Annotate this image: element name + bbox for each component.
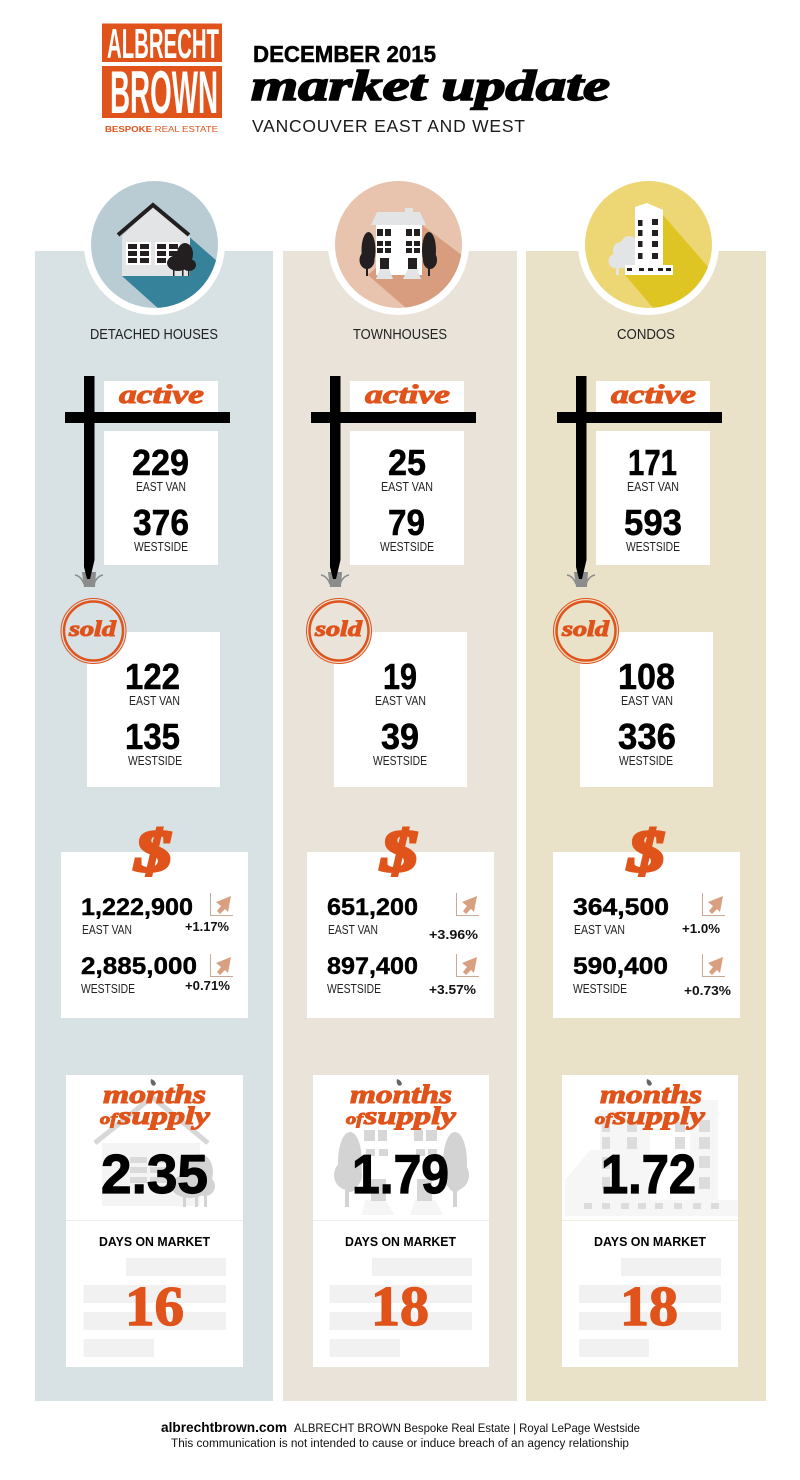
supply card: detached: of [100, 1111, 119, 1128]
active sign: detached: EAST VAN [136, 480, 186, 494]
footer: This communication is not intended to cause or induce breach of an agency relationship [171, 1438, 629, 1450]
supply card: condos: of [595, 1111, 614, 1128]
footer: ALBRECHT BROWN Bespoke Real Estate | Royal LePage Westside [294, 1421, 640, 1435]
active sign: townhouses: WESTSIDE [380, 540, 434, 554]
sold: detached: 135 [125, 716, 180, 757]
sold: detached: WESTSIDE [128, 754, 182, 768]
sold: detached: sold [68, 616, 117, 641]
price panel: detached: 2,885,000 [81, 953, 197, 980]
sold: condos: EAST VAN [621, 694, 673, 708]
sold: townhouses: sold [314, 616, 363, 641]
price panel: townhouses: +3.57% [429, 982, 476, 997]
sold: detached [61, 598, 220, 787]
active sign: detached [65, 376, 230, 587]
price panel: detached: $ [134, 818, 172, 884]
price panel: condos: EAST VAN [574, 923, 625, 937]
supply card: townhouses: of [346, 1111, 365, 1128]
sold: townhouses: WESTSIDE [373, 754, 427, 768]
sold: condos [554, 598, 713, 787]
supply card: condos: supply [612, 1103, 706, 1130]
logo [102, 20, 222, 134]
supply card: detached: months [103, 1080, 206, 1109]
title: market update: market update [251, 63, 610, 110]
sold: detached: 122 [125, 656, 180, 697]
supply card: detached: DAYS ON MARKET [99, 1234, 210, 1249]
active sign: detached: 229 [132, 442, 189, 483]
active sign: townhouses: active [365, 380, 450, 409]
active sign: condos: active [611, 380, 696, 409]
price panel: townhouses: +3.96% [429, 927, 478, 942]
active sign: condos: EAST VAN [627, 480, 679, 494]
sold: townhouses: 39 [381, 716, 419, 757]
active sign: condos: WESTSIDE [626, 540, 680, 554]
price panel: condos: $ [627, 818, 665, 884]
title: date: DECEMBER 2015 [253, 41, 436, 67]
active sign: condos [557, 376, 722, 587]
active sign: townhouses [311, 376, 476, 587]
supply card: townhouses: 1.79 [352, 1143, 449, 1205]
supply card: condos [562, 1075, 738, 1367]
price panel: detached: +1.17% [185, 919, 229, 934]
label: townhouses: TOWNHOUSES [353, 327, 447, 343]
footer: albrechtbrown.com [161, 1419, 287, 1435]
price panel: townhouses: 651,200 [327, 894, 418, 921]
price panel: townhouses: EAST VAN [328, 923, 378, 937]
supply card: townhouses: months [350, 1080, 452, 1109]
panel: townhouses background [283, 251, 517, 1401]
price panel: condos: 590,400 [573, 953, 668, 980]
supply card: condos: months [600, 1080, 702, 1109]
price panel: condos: WESTSIDE [573, 982, 627, 996]
active sign: townhouses: 25 [388, 442, 426, 483]
sold: condos: 108 [618, 656, 675, 697]
active sign: detached: 376 [133, 502, 189, 543]
label: detached houses: DETACHED HOUSES [90, 327, 218, 343]
supply card: condos: 1.72 [601, 1143, 696, 1205]
sold: townhouses: 19 [383, 656, 417, 697]
supply card: detached: supply [117, 1103, 211, 1130]
icon: condo tower [578, 174, 719, 315]
supply card: townhouses: DAYS ON MARKET [345, 1234, 456, 1249]
supply card: detached [66, 1075, 243, 1367]
sold: condos: 336 [618, 716, 676, 757]
supply card: condos: 18 [620, 1276, 678, 1338]
logo: BESPOKE REAL ESTATE [105, 125, 218, 134]
supply card: townhouses: 18 [371, 1276, 429, 1338]
active sign: townhouses: 79 [388, 502, 425, 543]
text: ALBRECHT [107, 20, 219, 67]
price panel: detached: +0.71% [185, 978, 230, 993]
active sign: detached: active [119, 380, 204, 409]
panel: condos background [526, 251, 766, 1401]
text: BROWN [110, 59, 218, 126]
price panel: detached [61, 818, 248, 1018]
price panel: condos: +1.0% [682, 921, 720, 936]
price panel: condos [553, 818, 740, 1018]
active sign: detached: WESTSIDE [134, 540, 188, 554]
price panel: detached: EAST VAN [82, 923, 132, 937]
supply card: townhouses [313, 1075, 489, 1367]
label: condos: CONDOS [617, 327, 675, 343]
supply card: condos: DAYS ON MARKET [594, 1234, 706, 1249]
price panel: townhouses: $ [380, 818, 418, 884]
price panel: detached: WESTSIDE [81, 982, 135, 996]
icon: townhouse [328, 174, 469, 315]
supply card: detached: 16 [125, 1276, 184, 1338]
icon: detached house [84, 174, 225, 315]
price panel: condos: 364,500 [573, 894, 669, 921]
sold: townhouses [306, 598, 467, 787]
sold: detached: EAST VAN [129, 694, 180, 708]
supply card: detached: 2.35 [101, 1143, 208, 1205]
active sign: townhouses: EAST VAN [381, 480, 433, 494]
price panel: detached: 1,222,900 [81, 894, 193, 921]
sold: condos: sold [561, 616, 610, 641]
active sign: condos: 593 [624, 502, 682, 543]
supply card: townhouses: supply [363, 1103, 457, 1130]
footer [161, 1419, 640, 1450]
price panel: townhouses: WESTSIDE [327, 982, 381, 996]
price panel: condos: +0.73% [684, 983, 731, 998]
price panel: townhouses: 897,400 [327, 953, 418, 980]
active sign: condos: 171 [628, 442, 677, 483]
subtitle: VANCOUVER EAST AND WEST [252, 116, 525, 136]
sold: condos: WESTSIDE [619, 754, 673, 768]
sold: townhouses: EAST VAN [375, 694, 426, 708]
panel: detached houses background [35, 251, 273, 1401]
price panel: townhouses [307, 818, 494, 1018]
